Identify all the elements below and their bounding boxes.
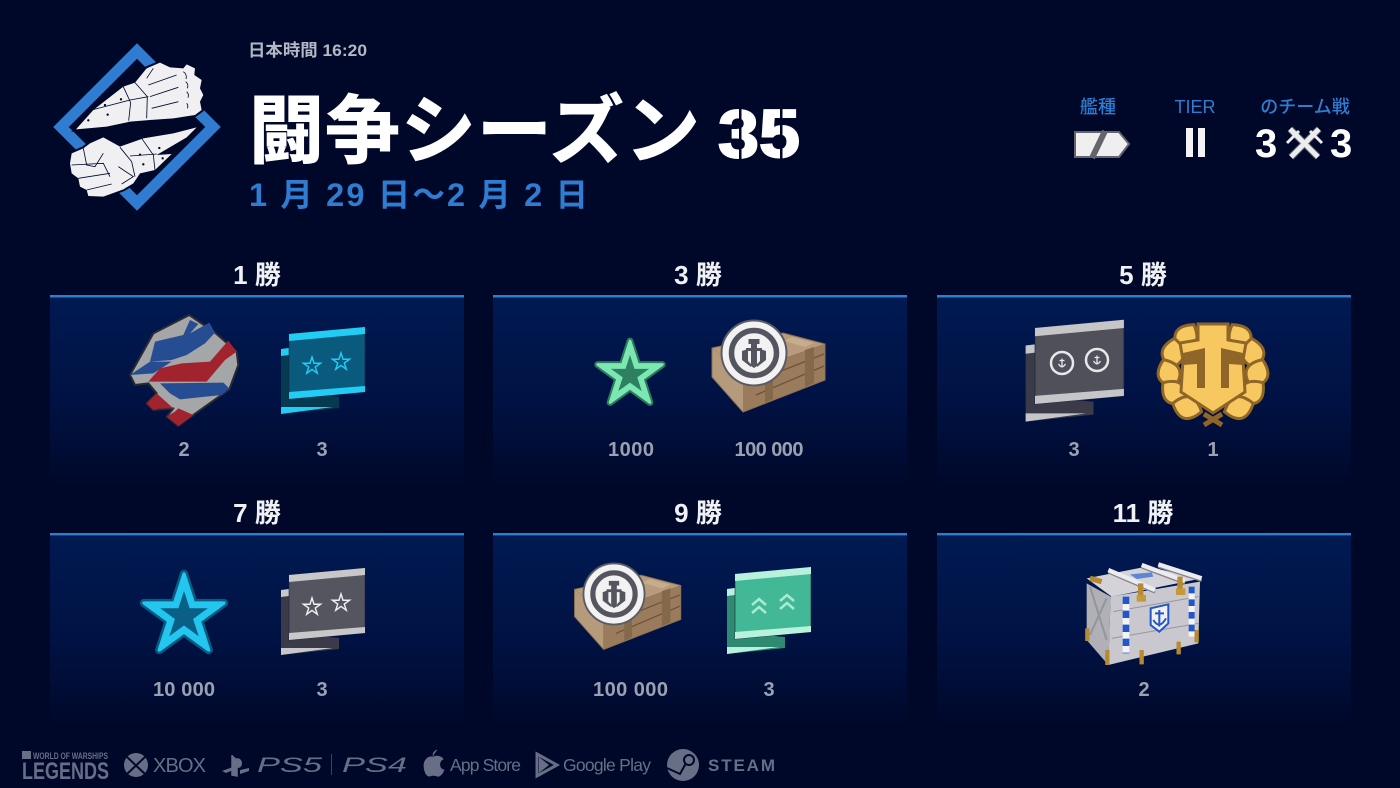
logo: App Store: App Store: [450, 755, 521, 775]
title: 闘争シーズン: [249, 70, 700, 179]
ship type: [1075, 97, 1129, 158]
logo: PlayStation 5 and 4: PS4: [342, 754, 407, 777]
tier: [1174, 97, 1216, 157]
panel: 11 wins: 11 勝: [1113, 498, 1173, 528]
logo: App Store: [424, 750, 521, 776]
icon: grey star flags: [281, 568, 365, 655]
icon: camouflage: [130, 315, 238, 426]
quantity: 100 000: [734, 439, 804, 461]
logo: PlayStation 5 and 4: [222, 754, 407, 777]
logo: Google Play: Google Play: [563, 755, 651, 775]
panel: 1 win: [50, 260, 464, 487]
panel: 9 wins: 9 勝: [674, 498, 722, 528]
logo: PlayStation 5 and 4: PS5: [257, 754, 323, 777]
time note: 日本時間 16:20: [248, 41, 367, 60]
icon: crossed swords: [1287, 129, 1322, 157]
logo: Steam: [667, 749, 775, 781]
team format: 3: [1255, 122, 1277, 166]
logo: World of Warships Legends: LEGENDS: [22, 758, 109, 785]
quantity: 10 000: [153, 679, 215, 701]
quantity: 1: [1207, 439, 1219, 461]
icon: cyan star flags: [281, 327, 365, 414]
panel: 7 wins: [50, 498, 464, 726]
panel: 7 wins: 7 勝: [233, 498, 281, 528]
icon: crate with credits badge: [712, 320, 825, 412]
team format: 3: [1330, 122, 1352, 166]
dates: 1 月 29 日～2 月 2 日: [249, 177, 588, 213]
icon: gold laurel medal: [1153, 319, 1273, 425]
logo: Xbox: XBOX: [153, 755, 206, 777]
logo: World of Warships Legends: WORLD OF WARSHIPS: [33, 751, 108, 762]
tier: TIER: [1174, 97, 1216, 117]
logo: Xbox: [124, 753, 206, 777]
panel: 3 wins: 3 勝: [674, 260, 722, 290]
quantity: 3: [763, 679, 775, 701]
title: 35: [718, 96, 800, 172]
panel: 5 wins: [937, 260, 1351, 487]
quantity: 3: [316, 679, 328, 701]
team format: [1255, 97, 1352, 166]
emblem: crossed gauntlets in a diamond: [61, 51, 213, 203]
icon: white supply chest: [1087, 564, 1202, 665]
quantity: 100 000: [593, 679, 668, 701]
team format: のチーム戦: [1260, 97, 1350, 117]
ship type: 艦種: [1080, 97, 1116, 117]
icon: blue star: [144, 574, 224, 650]
logo: Steam: STEAM: [708, 756, 775, 775]
icon: green chevron flags: [727, 567, 811, 654]
icon: grey flags with anchors: [1026, 320, 1124, 422]
panel: 1 win: 1 勝: [233, 260, 281, 290]
panel: 11 wins: [937, 498, 1351, 726]
logo: World of Warships Legends: [22, 751, 109, 785]
quantity: 1000: [608, 439, 654, 461]
icon: crate with credits badge: [575, 563, 681, 649]
icon: green star: [598, 341, 662, 403]
panel: 5 wins: 5 勝: [1119, 260, 1167, 290]
panel: 3 wins: [493, 260, 907, 487]
quantity: 3: [1068, 439, 1080, 461]
panel: 9 wins: [493, 498, 907, 726]
quantity: 3: [316, 439, 328, 461]
quantity: 2: [178, 439, 190, 461]
footer platform logos: [22, 749, 775, 785]
quantity: 2: [1138, 679, 1150, 701]
